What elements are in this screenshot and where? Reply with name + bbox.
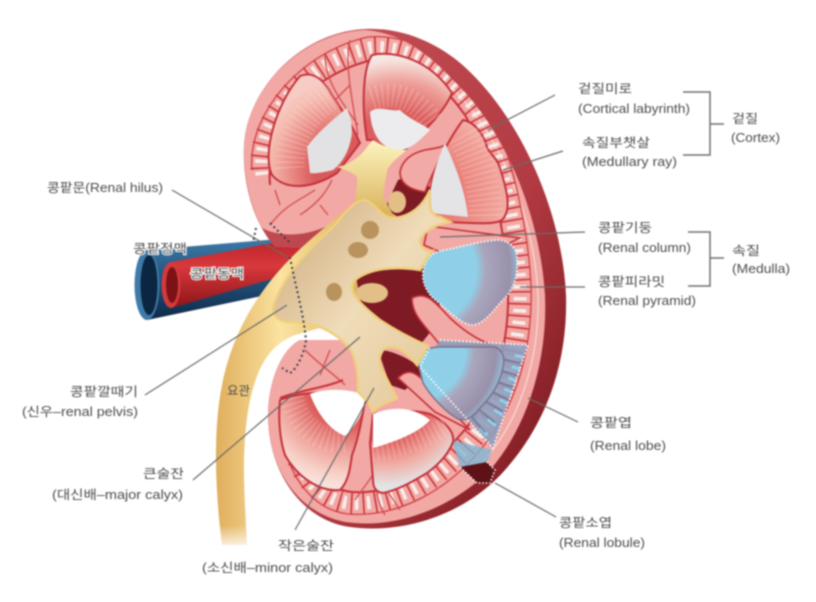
- renal column pink folds: [398, 145, 520, 430]
- label: medulla: (Medulla): [732, 262, 790, 276]
- ureter: [215, 210, 360, 547]
- renal artery: [162, 238, 310, 308]
- label: renal lobe: (Renal lobe): [590, 439, 666, 453]
- pyramid: upper left: [269, 74, 360, 186]
- label: renal lobule: (Renal lobule): [559, 536, 645, 550]
- cortex bracket: [683, 92, 724, 155]
- cortex rim highlight: [452, 88, 538, 462]
- label: cortex: 겉질: [732, 112, 758, 126]
- label: cortex: (Cortex): [731, 131, 780, 145]
- clipped ladder vessels: [252, 37, 531, 514]
- medulla bracket: [688, 232, 724, 286]
- pyramid: lower right: [370, 409, 453, 493]
- pyramid: upper centre: [364, 54, 452, 152]
- renal pelvis and calyces: [273, 190, 450, 412]
- label: renal vein: 콩팥정맥: [133, 242, 187, 256]
- label: medullary ray: (Medullary ray): [582, 155, 677, 169]
- inner arcuate vessel: [270, 59, 508, 492]
- ureter end fade: [215, 525, 253, 547]
- label: renal column: 콩팥기둥: [598, 221, 652, 235]
- label: renal lobule: [559, 516, 645, 550]
- label: minor calyx: 작은술잔: [278, 539, 335, 553]
- label: renal lobule: 콩팥소엽: [559, 516, 612, 530]
- label: renal column: [598, 221, 691, 255]
- renal lobe blue tint: [435, 340, 528, 448]
- label: major calyx: [52, 467, 185, 502]
- label: cortex: [731, 112, 780, 145]
- renal lobule dotted outline: [452, 440, 495, 483]
- label: renal pelvis: (신우–renal pelvis): [22, 405, 138, 419]
- outer arcuate vessel: [252, 37, 531, 514]
- label: renal hilus: 콩팥문(Renal hilus): [47, 181, 163, 195]
- label: cortical labyrinth: (Cortical labyrinth): [578, 102, 690, 116]
- label: renal lobe: [590, 416, 666, 453]
- label: ureter: 요관: [227, 384, 250, 398]
- kidney outer capsule: [244, 29, 566, 528]
- sinus cavities: [345, 178, 440, 390]
- column branches: [270, 40, 470, 515]
- medullary ray stripes: [261, 48, 520, 503]
- calyx ovals: [356, 191, 406, 303]
- kidney cortex: [244, 30, 545, 523]
- label: major calyx: (대신배–major calyx): [52, 488, 183, 502]
- minor calyx: top: [337, 140, 407, 218]
- label: renal pyramid: 콩팥피라밋: [598, 275, 665, 289]
- label: renal artery: 콩팥동맥: [190, 267, 244, 281]
- renal lobe dotted outline: [420, 340, 528, 448]
- pyramid: lower blue: [418, 347, 504, 420]
- hilum dotted boundary: [253, 223, 306, 373]
- pyramid: lower left: [279, 390, 366, 490]
- label: renal pelvis: [22, 385, 138, 419]
- label: renal column: (Renal column): [598, 241, 691, 255]
- label: renal pyramid: [598, 275, 696, 308]
- label: medullary ray: 속질부챗살: [582, 135, 651, 150]
- labels: [22, 82, 790, 575]
- label: cortical labyrinth: [578, 82, 690, 116]
- pyramid: blue renal pyramid: [423, 240, 517, 325]
- label: renal pyramid: (Renal pyramid): [598, 294, 696, 308]
- pelvis openings: [326, 221, 379, 301]
- cortical radiate arteries: [261, 48, 520, 503]
- label: minor calyx: (소신배–minor calyx): [202, 561, 333, 575]
- label: cortical labyrinth: 겉질미로: [578, 82, 632, 96]
- brackets: [683, 92, 724, 286]
- label: renal lobe: 콩팥엽: [590, 416, 632, 430]
- label: major calyx: 큰술잔: [143, 467, 185, 481]
- label: medullary ray: [582, 135, 677, 169]
- label: medulla: 속질: [732, 244, 760, 258]
- leader lines: [145, 95, 585, 530]
- label: medulla: [732, 244, 790, 276]
- label: minor calyx: [202, 539, 335, 575]
- lower lobe vessel: [280, 380, 343, 398]
- renal vein: [134, 238, 290, 320]
- pyramid: upper right: [430, 120, 508, 223]
- label: renal pelvis: 콩팥깔때기: [70, 385, 138, 399]
